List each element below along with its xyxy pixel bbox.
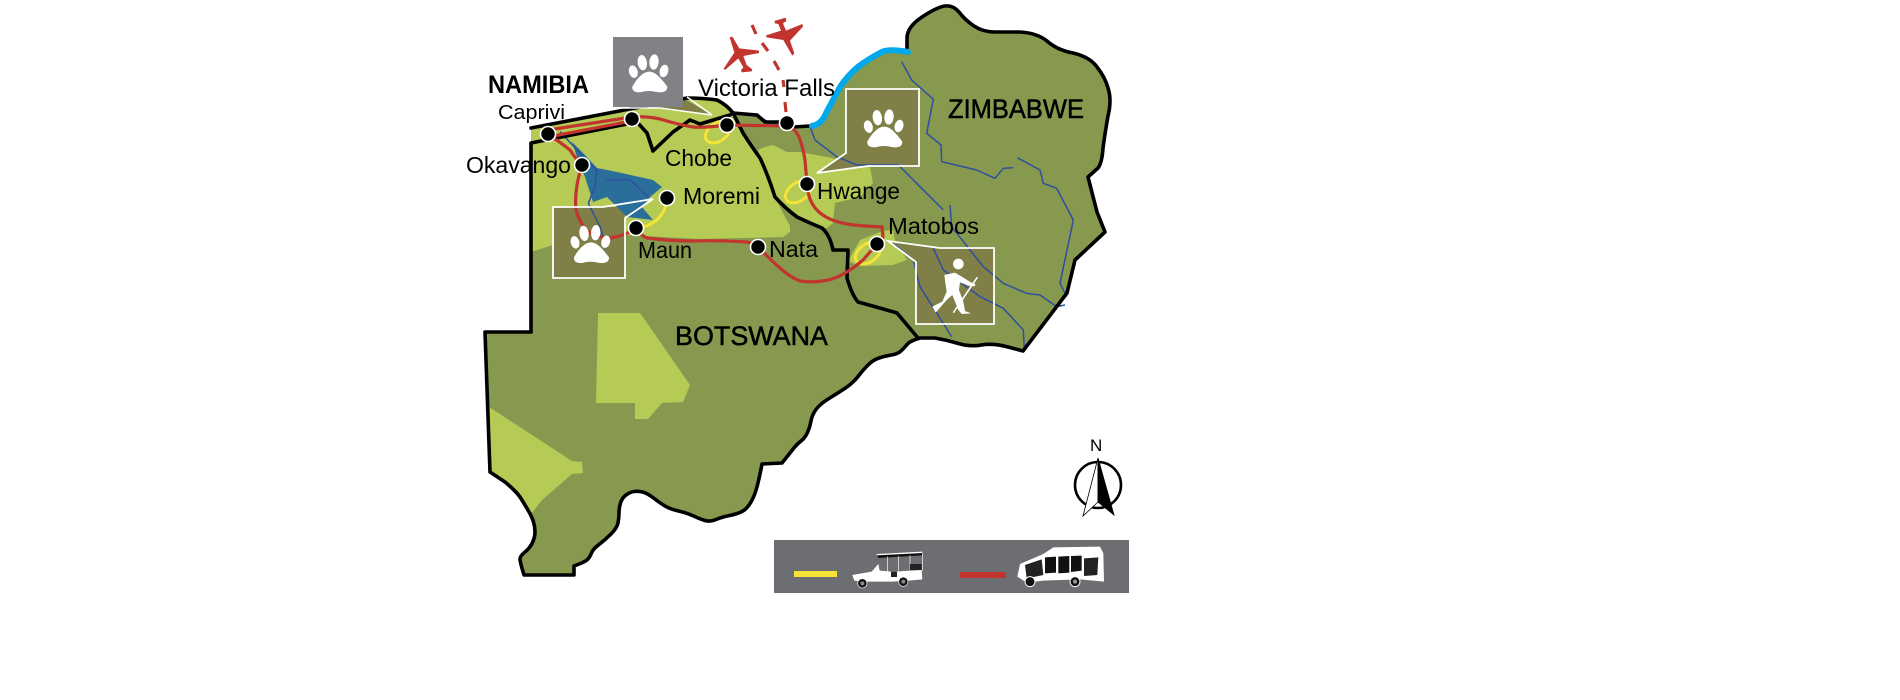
country: Botswana (485, 98, 920, 575)
legend: yellow line (794, 571, 837, 577)
callout: Moremi wildlife, box with paw (553, 199, 653, 278)
label: Maun: Maun (638, 237, 692, 263)
country: Zimbabwe (733, 6, 1110, 351)
rivers (560, 62, 1073, 350)
label: BOTSWANA: BOTSWANA (675, 321, 828, 351)
north arrow: N (1090, 436, 1102, 455)
park area: Hwange (758, 145, 873, 228)
callout: Matobos walking, box with hiker (888, 241, 994, 324)
label: NAMIBIA: NAMIBIA (488, 71, 589, 99)
callout: Hwange wildlife, box with paw (817, 89, 919, 173)
icon: minibus (1017, 547, 1104, 587)
icon: plane heading north-west (724, 37, 759, 72)
label: Victoria Falls: Victoria Falls (698, 75, 835, 102)
label: Nata: Nata (769, 236, 818, 262)
park area: Matobos (850, 230, 907, 266)
legend panel (774, 540, 1129, 593)
label: Chobe: Chobe (665, 145, 732, 171)
label: ZIMBABWE: ZIMBABWE (948, 94, 1084, 124)
legend: red line (960, 572, 1006, 578)
country borders (485, 6, 1110, 575)
callout fills (553, 89, 994, 324)
label: Moremi: Moremi (683, 183, 760, 209)
Okavango delta (572, 142, 662, 220)
park area: central Kalahari (596, 313, 690, 419)
icon: safari jeep (852, 552, 922, 588)
red route: overland bus (548, 117, 883, 282)
label: Matobos: Matobos (888, 213, 979, 239)
yellow route: game drives (640, 117, 885, 268)
map base: Botswana and Zimbabwe (485, 6, 1110, 575)
stop markers (540, 112, 884, 254)
park area: Kgalagadi (489, 407, 583, 513)
label: Hwange: Hwange (817, 178, 900, 204)
icon: plane heading south-east (766, 18, 803, 56)
north arrow (1075, 436, 1121, 516)
flight path: dashed red line (752, 25, 786, 112)
park area: northern Botswana (531, 98, 790, 252)
callout: Chobe wildlife, grey box with paw (600, 37, 712, 115)
icon: hiker (932, 259, 977, 314)
Zambezi river (812, 50, 908, 126)
label: Okavango: Okavango (466, 152, 571, 178)
label: Caprivi: Caprivi (498, 102, 565, 124)
